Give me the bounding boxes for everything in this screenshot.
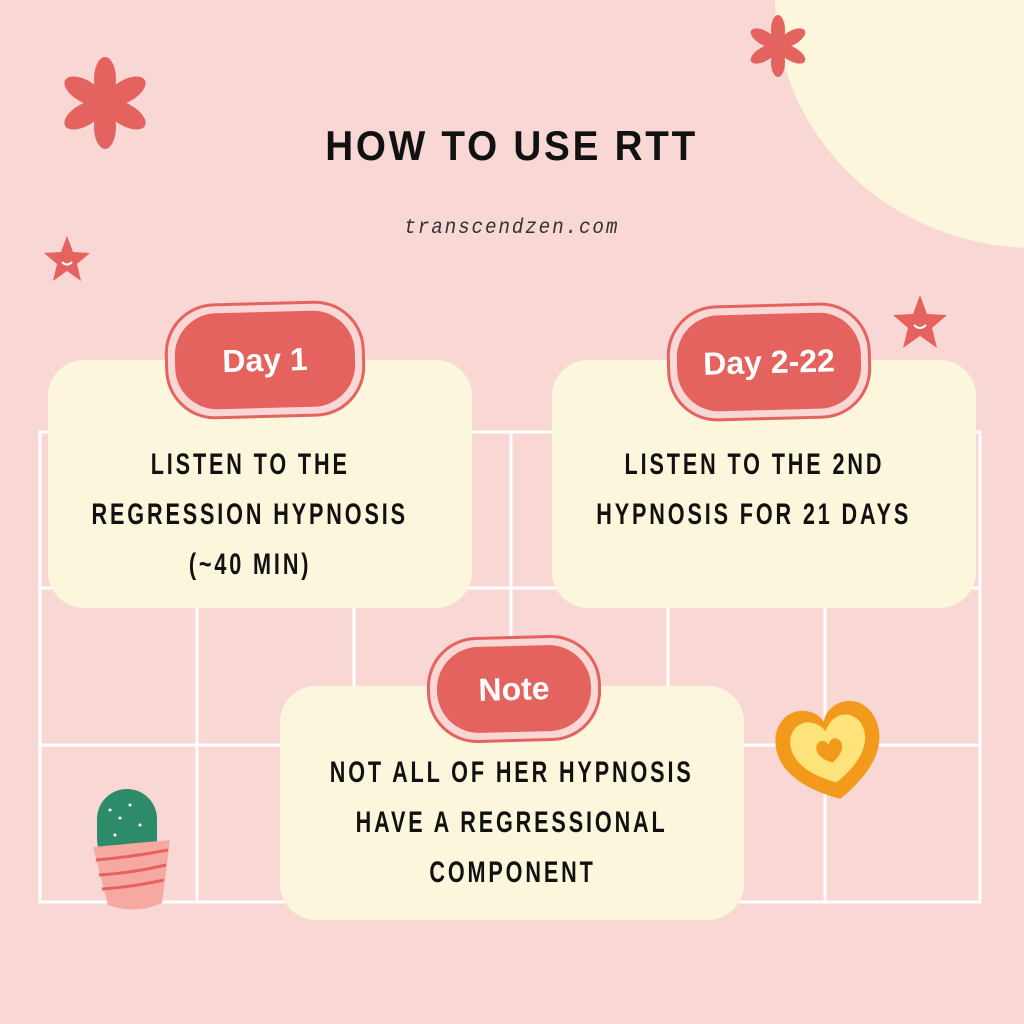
panel: day 2-22 — [552, 360, 976, 608]
icon: star left — [44, 236, 90, 281]
text: note: COMPONENT — [429, 856, 595, 889]
pill: Day 2-22 — [666, 301, 872, 423]
pill: Note — [426, 634, 602, 744]
text: day 1 — [92, 448, 408, 581]
icon: cactus — [93, 789, 170, 910]
text: day 2-22: HYPNOSIS FOR 21 DAYS — [597, 498, 911, 531]
icon: heart — [775, 700, 880, 799]
text: day 1: LISTEN TO THE — [150, 448, 350, 481]
panel: note — [280, 686, 744, 920]
pill: Day 1 — [164, 299, 366, 421]
sun circle — [775, 0, 1024, 248]
title: HOW TO USE RTT — [326, 122, 698, 169]
icon: star right — [893, 295, 947, 348]
text: note: NOT ALL OF HER HYPNOSIS — [330, 756, 694, 789]
pill: Day 1: Day 1 — [222, 340, 308, 379]
text: day 1: (~40 MIN) — [189, 548, 311, 581]
subtitle: transcendzen.com — [405, 217, 619, 240]
text: day 2-22: LISTEN TO THE 2ND — [624, 448, 884, 481]
text: day 1: REGRESSION HYPNOSIS — [92, 498, 408, 531]
pill: Day 2-22: Day 2-22 — [703, 342, 835, 381]
icon: flower top right — [750, 15, 806, 77]
pill: Note: Note — [478, 670, 550, 707]
text: note: HAVE A REGRESSIONAL — [356, 806, 668, 839]
icon: flower left — [64, 57, 146, 149]
text: day 2-22 — [597, 448, 911, 531]
panel: day 1 — [48, 360, 472, 608]
text: note — [330, 756, 694, 889]
